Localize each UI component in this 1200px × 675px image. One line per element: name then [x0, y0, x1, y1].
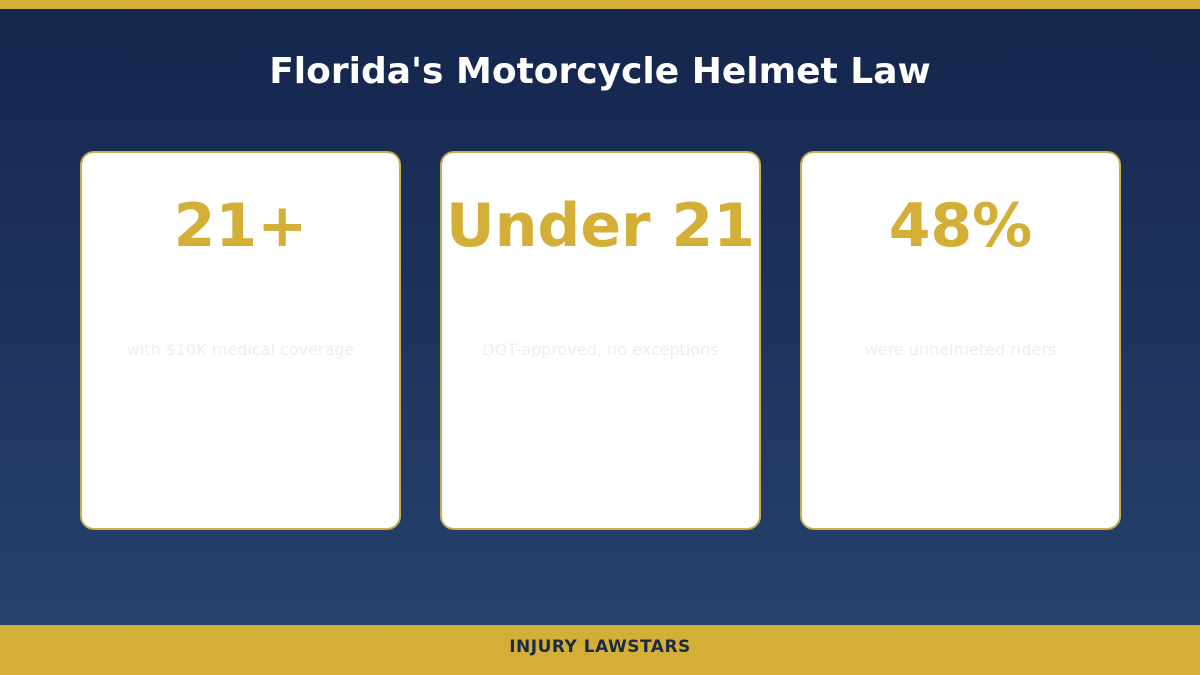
card: 48%: [800, 151, 1121, 530]
stat number: 21+: [174, 191, 307, 261]
title: Florida's Motorcycle Helmet Law: [269, 51, 931, 92]
stat number: 48%: [889, 191, 1032, 261]
footer: [0, 625, 1200, 675]
footer: INJURY LAWSTARS: [509, 637, 691, 657]
description: were unhelmeted riders: [865, 340, 1056, 359]
card: Under 21: [440, 151, 761, 530]
description: DOT-approved, no exceptions: [482, 340, 719, 359]
card: 21+: [80, 151, 401, 530]
stat number: Under 21: [446, 191, 755, 261]
description: with $10K medical coverage: [127, 340, 354, 359]
